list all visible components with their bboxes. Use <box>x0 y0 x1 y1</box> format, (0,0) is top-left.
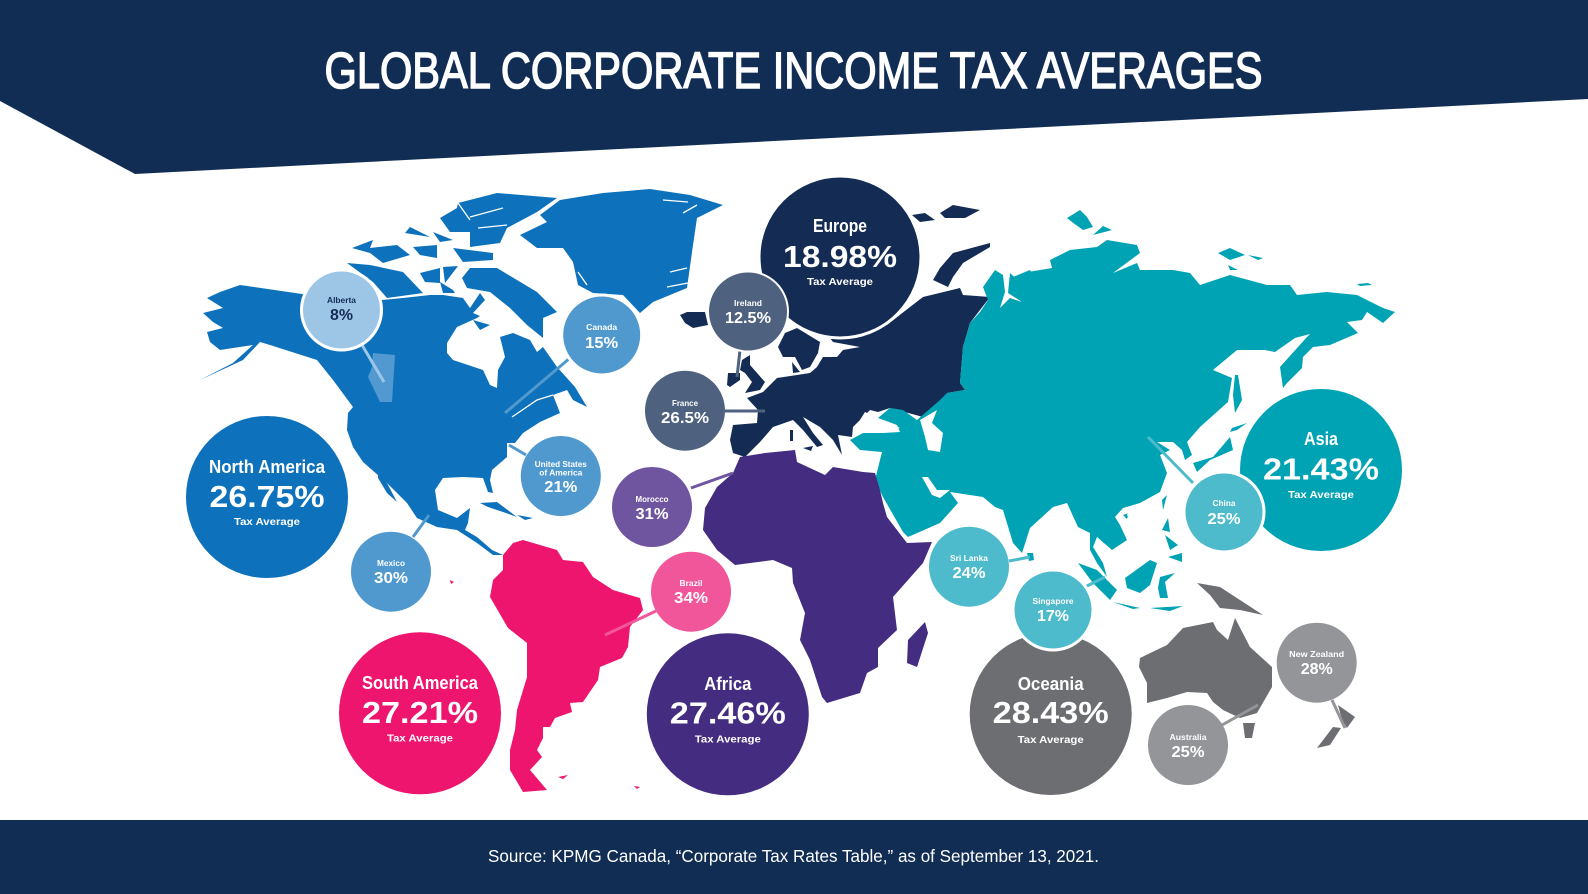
callout: Brazil: Brazil <box>680 578 702 588</box>
callout: Singapore: Singapore <box>1032 596 1074 606</box>
callout: Asia: 21.43% <box>1263 452 1379 486</box>
map: North America <box>200 189 723 555</box>
callout: United States <box>509 436 601 516</box>
world map <box>200 189 1395 792</box>
callout: Sri Lanka: Sri Lanka <box>950 553 988 563</box>
source note: Source: KPMG Canada, “Corporate Tax Rates Table,” as of September 13, 2021. <box>488 846 1099 866</box>
callout: Oceania <box>970 633 1132 795</box>
callout: South America: 27.21% <box>362 695 478 730</box>
callout: France: France <box>672 398 698 408</box>
callout: China <box>1148 437 1264 552</box>
callout: Europe: Europe <box>813 216 867 236</box>
callout: France: 26.5% <box>661 410 709 427</box>
callout: United States: United States <box>535 459 587 469</box>
callout: Europe: 18.98% <box>783 239 897 274</box>
callout: Canada <box>505 295 642 413</box>
callout: Mexico: Mexico <box>377 558 405 568</box>
callout: Ireland: 12.5% <box>725 310 771 327</box>
callout: North America: North America <box>209 457 326 477</box>
Alberta highlight region <box>368 353 395 402</box>
callout: South America <box>339 632 501 794</box>
callout: Ireland <box>708 272 788 377</box>
callout: Alberta <box>302 270 384 382</box>
inland seas <box>855 410 1134 520</box>
callout: New Zealand: 28% <box>1301 661 1333 678</box>
callout: United States: 21% <box>544 479 577 496</box>
callout: Asia: Asia <box>1304 429 1339 449</box>
callout: North America <box>186 416 348 578</box>
callout: Alberta: Alberta <box>327 295 356 305</box>
callout: Sri Lanka: 24% <box>952 565 986 582</box>
callout: Africa: 27.46% <box>670 696 786 730</box>
callout: New Zealand <box>1277 623 1357 728</box>
coastal inlets <box>458 200 697 417</box>
callout: Australia: 25% <box>1172 744 1204 761</box>
callout: Mexico: 30% <box>374 570 408 587</box>
callout: Canada: Canada <box>586 322 617 332</box>
callout: China: 25% <box>1208 511 1240 528</box>
callout: Canada: 15% <box>585 335 618 352</box>
header banner <box>0 0 1588 174</box>
callout: Mexico <box>351 515 431 612</box>
callout: Australia: Australia <box>1170 732 1207 742</box>
callout: China: China <box>1212 498 1236 508</box>
callout: Singapore <box>1013 570 1105 650</box>
map: Oceania <box>1139 583 1355 748</box>
map: Africa <box>703 450 932 703</box>
callout: Africa <box>647 633 809 795</box>
map: South America <box>450 540 643 792</box>
map: Europe <box>680 205 990 457</box>
callout: North America: 26.75% <box>210 479 324 514</box>
title: GLOBAL CORPORATE INCOME TAX AVERAGES <box>324 42 1262 99</box>
callout: Brazil: 34% <box>674 590 708 607</box>
callout: Morocco: 31% <box>636 506 668 523</box>
callout: France <box>645 371 765 451</box>
callout: New Zealand: New Zealand <box>1289 649 1344 659</box>
callout: Europe <box>759 176 921 338</box>
callout: Oceania: 28.43% <box>993 695 1109 730</box>
callout: South America: Tax Average <box>387 732 453 744</box>
callout: Asia: Tax Average <box>1288 489 1354 501</box>
callout: Singapore: 17% <box>1037 608 1069 625</box>
callout: Morocco <box>612 467 733 547</box>
callout: Sri Lanka <box>929 527 1030 607</box>
callout: Ireland: Ireland <box>734 298 762 308</box>
callout: United States: of America <box>539 468 583 478</box>
callout: Europe: Tax Average <box>807 276 873 288</box>
callout: Asia <box>1240 389 1402 551</box>
callout: Oceania: Oceania <box>1018 674 1085 694</box>
callout: Australia <box>1148 705 1258 785</box>
callout: South America: South America <box>362 673 479 693</box>
callout: Alberta: 8% <box>330 307 353 324</box>
callout: Morocco: Morocco <box>636 494 668 504</box>
callout: Africa: Tax Average <box>695 734 761 746</box>
callout: Oceania: Tax Average <box>1018 734 1084 746</box>
callout: Brazil <box>605 552 731 635</box>
callout: North America: Tax Average <box>234 516 300 528</box>
callout: Africa: Africa <box>704 674 752 694</box>
map: Asia <box>850 210 1395 611</box>
footer bar <box>0 820 1588 894</box>
